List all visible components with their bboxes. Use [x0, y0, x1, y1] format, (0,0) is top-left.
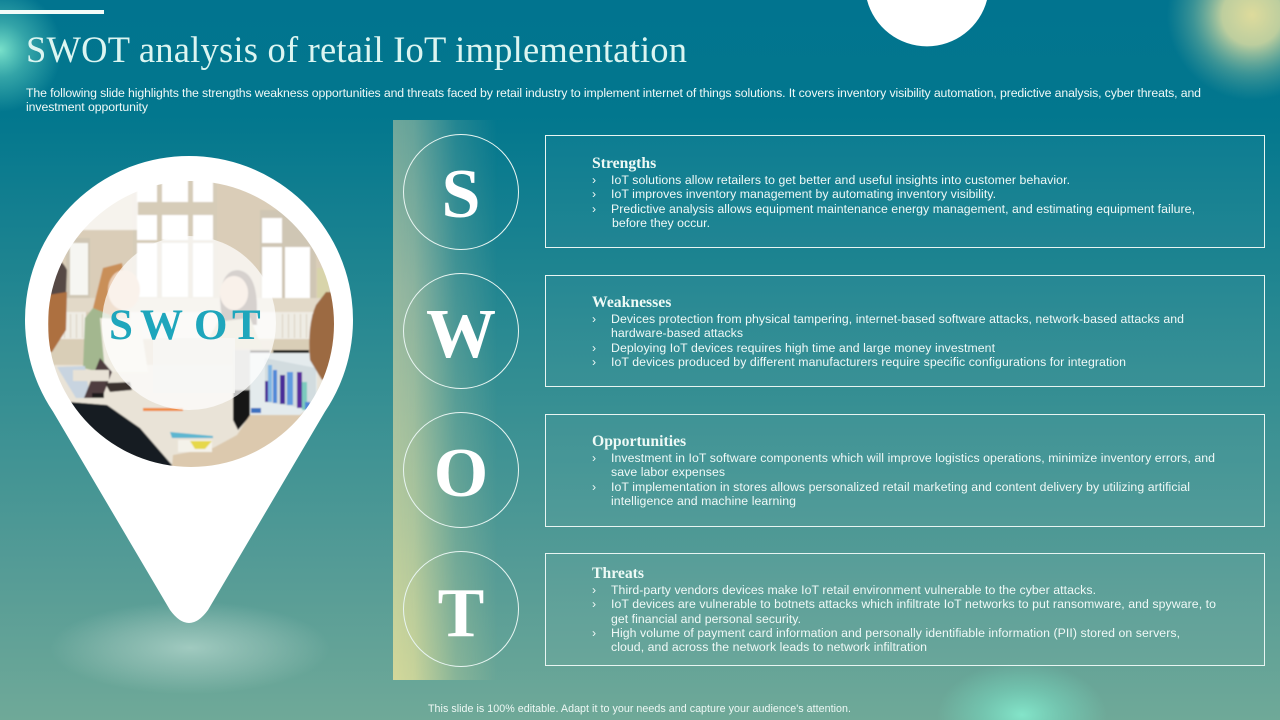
letter S circle [404, 134, 518, 250]
SWOT label: SWOT [109, 302, 261, 349]
panel: weaknesses: Weaknesses [592, 294, 671, 311]
letter O circle [404, 412, 518, 528]
letter T circle [404, 552, 518, 666]
letter T circle: T [438, 575, 484, 652]
letter strip [393, 120, 498, 680]
panel: strengths: Strengths [592, 155, 656, 172]
letter S circle: S [442, 156, 480, 233]
panel: weaknesses: Devices protection from physical tampering, internet-based software attacks, network-based attacks and [611, 312, 1184, 326]
panel: threats: › [592, 583, 596, 597]
panel: strengths: › [592, 173, 596, 187]
footer note: This slide is 100% editable. Adapt it to your needs and capture your audience's attention. [428, 703, 851, 715]
panel: weaknesses: hardware-based attacks [611, 326, 743, 340]
panel: strengths: IoT solutions allow retailers to get better and useful insights into customer behavior. [611, 173, 1070, 187]
intro text: The following slide highlights the strengths weakness opportunities and threats faced by retail industry to implement internet of things solutions. It covers inventory visibility automation, predictive analysis, cyber threats, and [26, 86, 1201, 100]
panel: strengths: › [592, 187, 596, 201]
location pin with photo [25, 156, 353, 623]
panel: threats: Third-party vendors devices make IoT retail environment vulnerable to the cyber attacks. [611, 583, 1096, 597]
panel: opportunities: Investment in IoT software components which will improve logistics operations, minimize inventory errors, and [611, 451, 1215, 465]
panel: weaknesses: › [592, 341, 596, 355]
panel: opportunities [546, 414, 1264, 526]
panel: threats: High volume of payment card information and personally identifiable information (PII) stored on servers, [611, 626, 1180, 640]
panel: threats: Threats [592, 565, 644, 582]
panel: weaknesses [546, 276, 1264, 386]
panel: strengths: › [592, 202, 596, 216]
title: SWOT analysis of retail IoT implementation [26, 29, 687, 70]
letter W circle [404, 274, 518, 388]
panel: strengths: IoT improves inventory management by automating inventory visibility. [611, 187, 996, 201]
laptop [153, 338, 235, 393]
letter W circle: W [426, 296, 496, 373]
translucent circle [102, 236, 276, 410]
panel: threats: › [592, 597, 596, 611]
panel: opportunities: save labor expenses [611, 465, 725, 479]
panel: threats: IoT devices are vulnerable to botnets attacks which infiltrate IoT networks to put ransomware, and spyware, to [611, 597, 1216, 611]
panel: opportunities: › [592, 451, 596, 465]
panel: threats: cloud, and across the network leads to network infiltration [611, 640, 927, 654]
panel: opportunities: › [592, 480, 596, 494]
accent line [0, 10, 104, 14]
intro text: investment opportunity [26, 100, 149, 114]
decorative white circle [867, 0, 987, 46]
pin shape [25, 156, 353, 623]
panel: strengths: before they occur. [612, 216, 710, 230]
panel: weaknesses: Deploying IoT devices requires high time and large money investment [611, 341, 996, 355]
panel: threats: get financial and personal security. [611, 612, 801, 626]
panel: threats [546, 554, 1264, 666]
panel: weaknesses: › [592, 312, 596, 326]
panel: threats: › [592, 626, 596, 640]
panel: weaknesses: IoT devices produced by different manufacturers require specific configurations for integration [611, 355, 1126, 369]
panel: opportunities: intelligence and machine learning [611, 494, 796, 508]
panel: strengths [546, 136, 1264, 248]
intro text [26, 86, 1201, 114]
panel: opportunities: IoT implementation in stores allows personalized retail marketing and content delivery by utilizing artificial [611, 480, 1190, 494]
panel: weaknesses: › [592, 355, 596, 369]
panel: opportunities: Opportunities [592, 433, 686, 450]
panel: strengths: Predictive analysis allows equipment maintenance energy management, and estimating equipment failure, [611, 202, 1195, 216]
team meeting photo [48, 175, 340, 480]
letter O circle: O [434, 435, 488, 512]
